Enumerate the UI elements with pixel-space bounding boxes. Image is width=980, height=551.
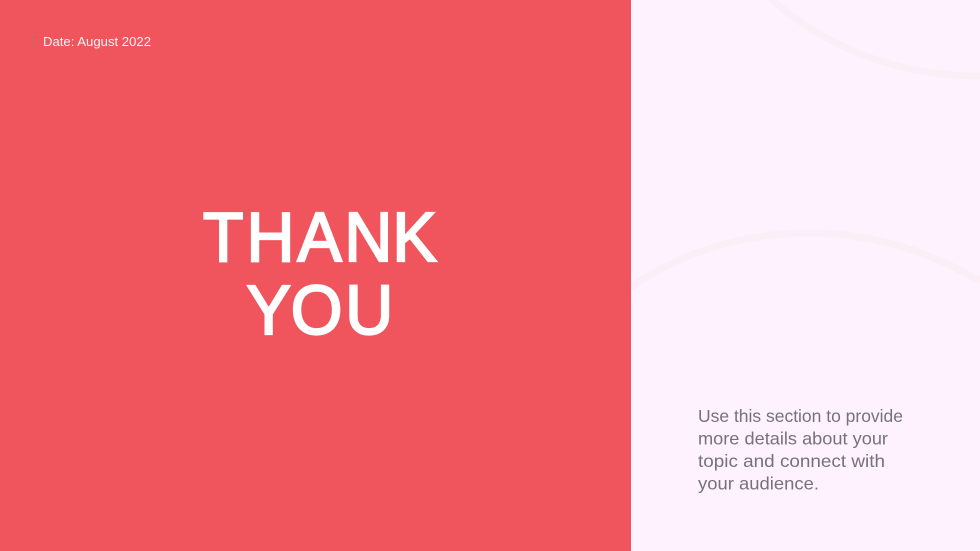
body text block: more details about your <box>698 428 888 448</box>
title: thank you <box>203 198 437 349</box>
decorative arc: middle <box>631 233 980 287</box>
body text block <box>698 406 903 494</box>
title: thank you: THANK <box>203 198 437 276</box>
panel: left red background <box>0 0 631 551</box>
decorative arc: top right <box>768 0 980 76</box>
body text block: your audience. <box>698 474 819 494</box>
body text block: topic and connect with <box>698 451 885 471</box>
title: thank you: YOU <box>247 271 393 349</box>
body text block: Use this section to provide <box>698 406 903 426</box>
date label: Date: August 2022 <box>43 35 151 49</box>
panel: right background <box>631 0 980 551</box>
